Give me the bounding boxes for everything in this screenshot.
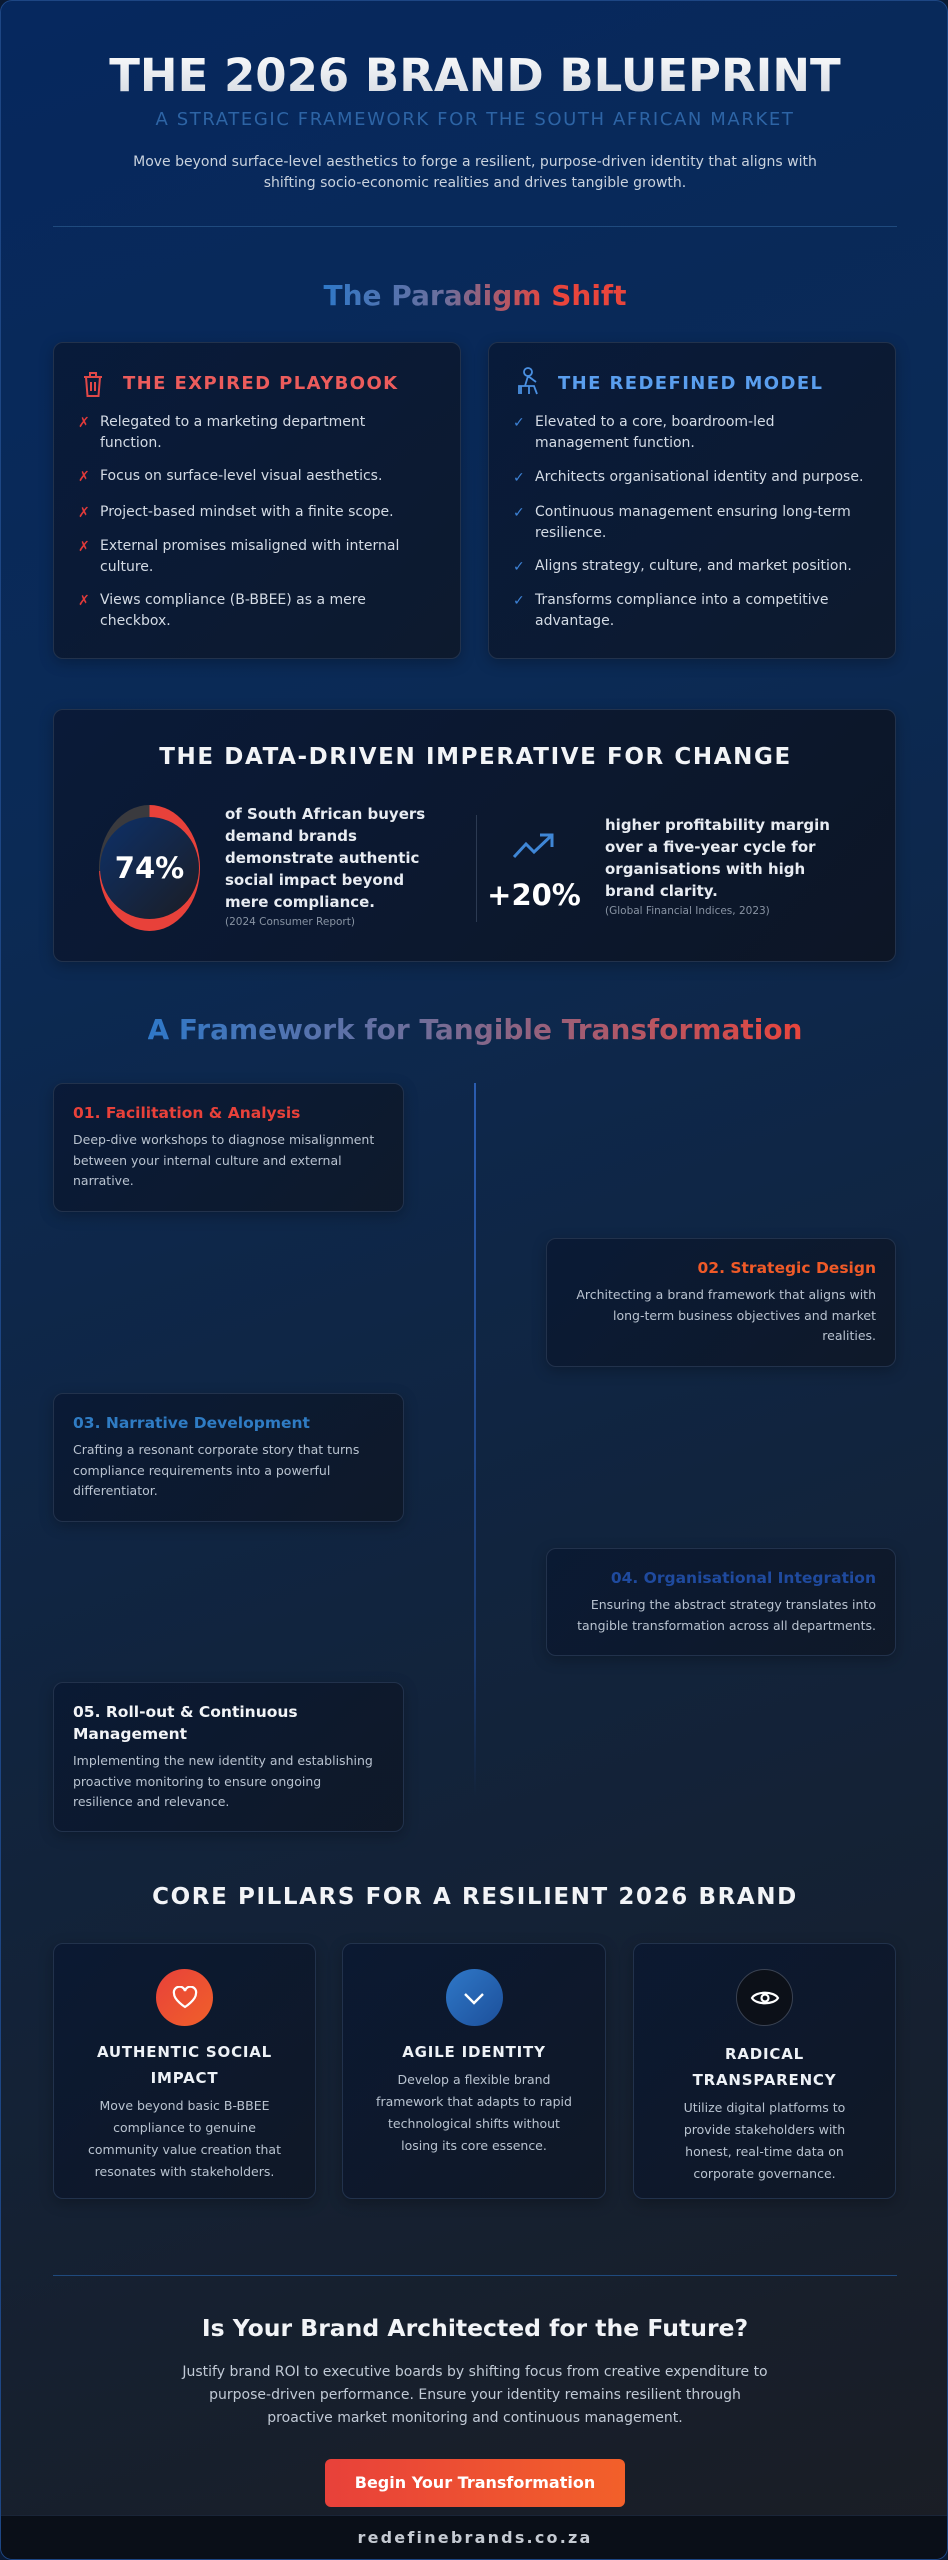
step 02 (546, 1238, 896, 1367)
step 03 (53, 1393, 404, 1522)
step 05 (53, 1682, 404, 1832)
heading: paradigm shift: The Paradigm Shift (323, 279, 626, 312)
stat text 74: of South African buyers demand brands demonstrate authentic social impact beyond mere compliance. (225, 805, 425, 911)
pillar: radical transparency (633, 1943, 896, 2199)
title: THE 2026 BRAND BLUEPRINT (109, 49, 841, 102)
panel: redefined model (488, 342, 896, 659)
pillar: social impact (53, 1943, 316, 2199)
list items (513, 414, 863, 629)
list items: Project-based mindset with a finite scope. (100, 504, 394, 520)
step 01: 01. Facilitation & Analysis (73, 1104, 300, 1122)
list items: Focus on surface-level visual aesthetics. (100, 468, 382, 484)
list items: Continuous management ensuring long-term resilience. (535, 504, 851, 541)
chart: donut 74% (99, 805, 200, 931)
timeline line (474, 1083, 476, 1796)
list items: ✓ (513, 505, 525, 521)
list items: ✓ (513, 470, 525, 486)
stat number 20: +20% (487, 878, 581, 912)
list items: ✗ (78, 415, 90, 431)
heading: framework: A Framework for Tangible Transformation (148, 1013, 802, 1046)
pillar: agile identity: Develop a flexible brand framework that adapts to rapid technological shifts without losing its core essence. (376, 2072, 572, 2153)
icon: chevron (446, 1969, 502, 2026)
list items (78, 414, 399, 629)
subtitle: A STRATEGIC FRAMEWORK FOR THE SOUTH AFRICAN MARKET (156, 109, 794, 130)
list items: Elevated to a core, boardroom-led management function. (535, 414, 774, 451)
heading: THE EXPIRED PLAYBOOK (123, 373, 399, 394)
button (325, 2459, 625, 2507)
icon: person (518, 367, 538, 394)
intro text: Move beyond surface-level aesthetics to forge a resilient, purpose-driven identity that aligns with shifting socio-economic realities and drives tangible growth. (133, 154, 817, 191)
list items: External promises misaligned with internal culture. (100, 538, 399, 575)
stat text 20: higher profitability margin over a five-year cycle for organisations with high brand clarity. (605, 816, 830, 900)
pillar: agile identity: AGILE IDENTITY (402, 2043, 546, 2061)
list items: Aligns strategy, culture, and market position. (535, 558, 852, 574)
panel: data-driven imperative (53, 709, 896, 962)
step 01: Deep-dive workshops to diagnose misalignment between your internal culture and external narrative. (73, 1132, 374, 1188)
heading: THE DATA-DRIVEN IMPERATIVE FOR CHANGE (159, 744, 792, 770)
step 02: 02. Strategic Design (698, 1259, 876, 1277)
list items: Transforms compliance into a competitive advantage. (535, 592, 829, 629)
pillar: social impact: AUTHENTIC SOCIAL IMPACT (97, 2043, 272, 2087)
list items: ✗ (78, 469, 90, 485)
icon: heart (156, 1969, 213, 2026)
list items: ✗ (78, 539, 90, 555)
title (1, 46, 948, 106)
step 02: Architecting a brand framework that aligns with long-term business objectives and market realities. (576, 1287, 876, 1343)
pillar: radical transparency: RADICAL TRANSPARENCY (693, 2045, 836, 2089)
step 03: 03. Narrative Development (73, 1414, 310, 1432)
stat text 20: (Global Financial Indices, 2023) (605, 905, 770, 917)
step 01 (53, 1083, 404, 1212)
list items: Relegated to a marketing department function. (100, 414, 365, 451)
list items: ✗ (78, 593, 90, 609)
step 05: Implementing the new identity and establishing proactive monitoring to ensure ongoing resilience and relevance. (73, 1753, 373, 1809)
stat text 74: (2024 Consumer Report) (225, 916, 355, 928)
icon: trash (84, 372, 102, 397)
step 05: 05. Roll-out & Continuous Management (73, 1703, 298, 1743)
icon: trending up (513, 834, 554, 858)
panel: expired playbook (53, 342, 461, 659)
list items: Architects organisational identity and purpose. (535, 469, 863, 485)
step 04 (546, 1548, 896, 1656)
pillar: social impact: Move beyond basic B-BBEE compliance to genuine community value creation that resonates with stakeholders. (88, 2098, 281, 2179)
step 04: 04. Organisational Integration (611, 1569, 876, 1587)
button: Begin Your Transformation (355, 2473, 595, 2492)
list items: ✓ (513, 415, 525, 431)
icon: eye (736, 1969, 793, 2026)
footer (1, 2515, 948, 2560)
list items: ✓ (513, 593, 525, 609)
heading: core pillars: CORE PILLARS FOR A RESILIENT 2026 BRAND (152, 1884, 798, 1910)
chart: donut 74%: 74% (115, 851, 184, 885)
step 03: Crafting a resonant corporate story that turns compliance requirements into a powerful differentiator. (73, 1442, 359, 1498)
list items: Views compliance (B-BBEE) as a mere checkbox. (100, 592, 366, 629)
footer: redefinebrands.co.za (358, 2528, 592, 2547)
list items: ✓ (513, 559, 525, 575)
pillar: radical transparency: Utilize digital platforms to provide stakeholders with honest, real-time data on corporate governance. (684, 2100, 845, 2181)
CTA heading: Is Your Brand Architected for the Future? (202, 2314, 748, 2342)
list items: ✗ (78, 505, 90, 521)
pillar: agile identity (342, 1943, 606, 2199)
heading: THE REDEFINED MODEL (558, 373, 823, 394)
CTA text: Justify brand ROI to executive boards by shifting focus from creative expenditure to purpose-driven performance. Ensure your identity remains resilient through proactive market monitoring and continuous management. (182, 2364, 768, 2426)
step 04: Ensuring the abstract strategy translates into tangible transformation across all departments. (577, 1597, 876, 1632)
